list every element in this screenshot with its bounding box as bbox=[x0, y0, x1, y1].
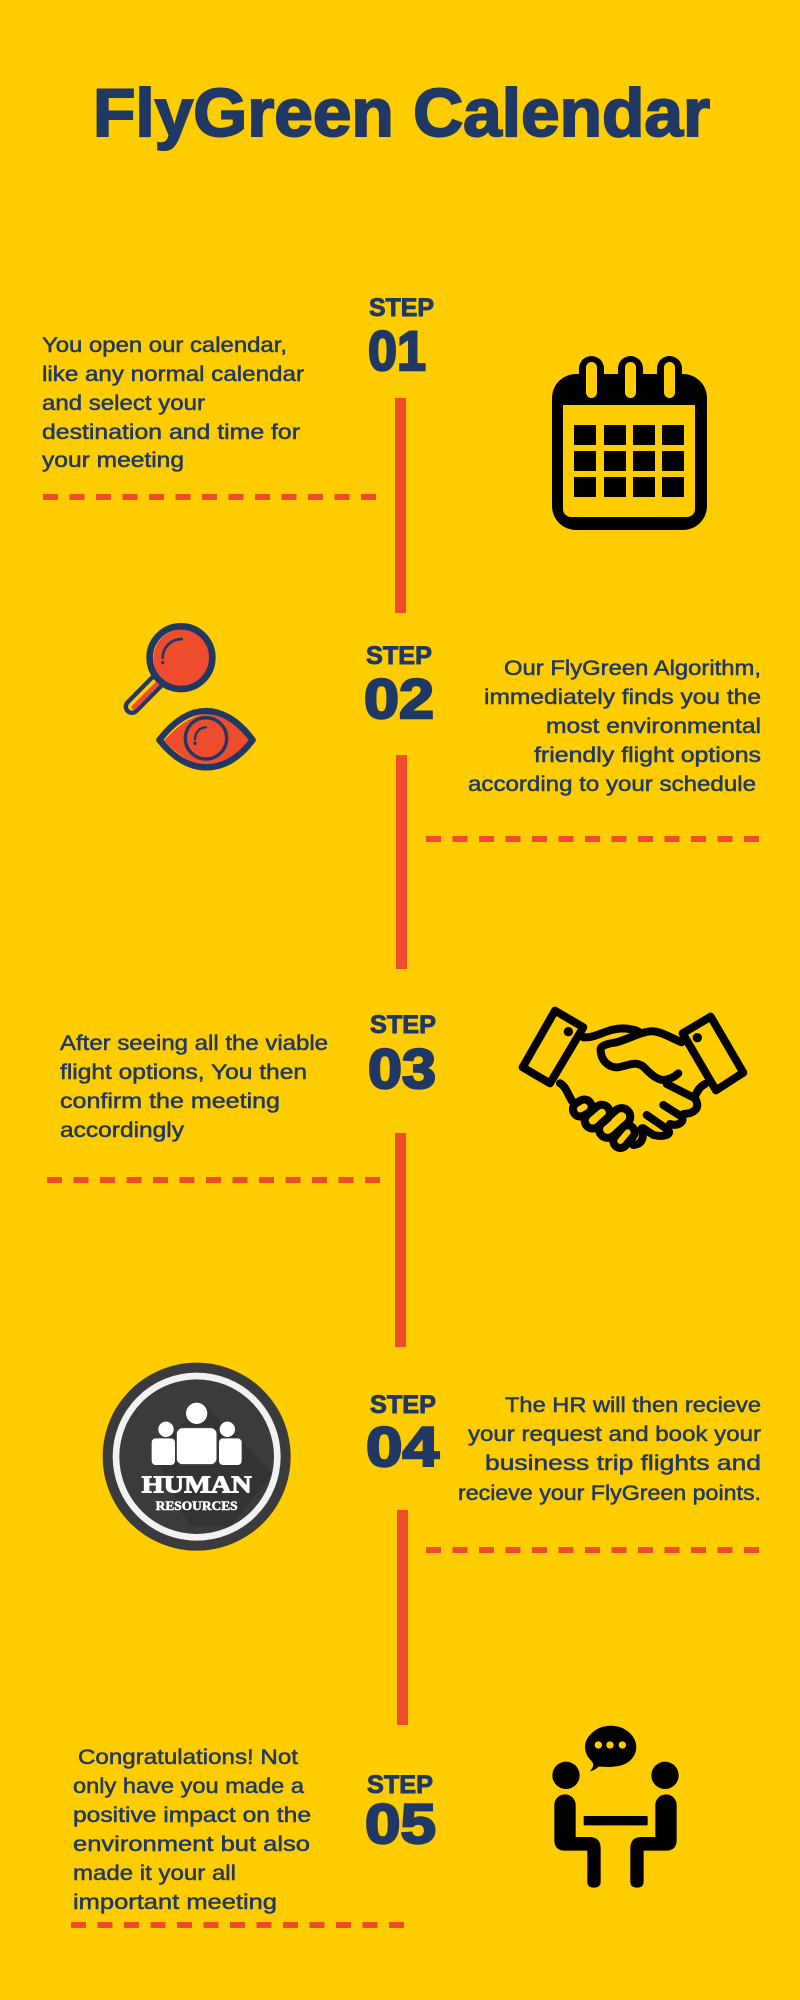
step 3 text bbox=[60, 1032, 328, 1142]
icon: human resources badge: HUMAN bbox=[142, 1473, 252, 1499]
step 1 dashed line bbox=[43, 494, 377, 500]
panel: step 3 bbox=[47, 1011, 743, 1347]
step 5 text bbox=[73, 1746, 311, 1914]
panel: step 2 bbox=[132, 626, 761, 969]
step 1 label: 01 bbox=[368, 319, 426, 382]
step 1 text bbox=[42, 334, 304, 472]
step 2 text: according to your schedule bbox=[468, 773, 756, 796]
step 2 text: immediately finds you the bbox=[484, 686, 761, 709]
step 3 text: After seeing all the viable bbox=[60, 1032, 328, 1055]
step 2 label bbox=[364, 642, 434, 730]
step 1 text: your meeting bbox=[42, 449, 184, 472]
step 5 text: important meeting bbox=[73, 1891, 277, 1914]
step 4 text: business trip flights and bbox=[485, 1452, 761, 1475]
step 1 label: STEP bbox=[369, 294, 434, 322]
panel: step 1 bbox=[42, 294, 707, 613]
step 4 dashed line bbox=[426, 1547, 761, 1553]
step 2 text bbox=[468, 657, 761, 796]
step 4 text: The HR will then recieve bbox=[505, 1394, 761, 1417]
step 4 label bbox=[366, 1391, 439, 1478]
step 2 text: friendly flight options bbox=[534, 744, 761, 767]
step 5 text: made it your all bbox=[73, 1862, 236, 1885]
step 5 text: environment but also bbox=[73, 1833, 310, 1856]
step 4 label: 04 bbox=[366, 1415, 439, 1478]
step 5 label: STEP bbox=[367, 1771, 433, 1799]
icon: magnifier and eye bbox=[132, 626, 253, 767]
step 3 vertical bar bbox=[395, 1133, 406, 1347]
step 5 text: Congratulations! Not bbox=[78, 1746, 298, 1769]
step 3 text: flight options, You then bbox=[60, 1061, 307, 1084]
step 5 text: only have you made a bbox=[73, 1775, 304, 1798]
step 4 vertical bar bbox=[397, 1510, 408, 1725]
step 3 text: accordingly bbox=[60, 1119, 185, 1142]
step 1 vertical bar bbox=[395, 398, 406, 613]
panel: step 5 bbox=[71, 1726, 679, 1925]
step 5 label: 05 bbox=[365, 1792, 436, 1855]
step 3 text: confirm the meeting bbox=[60, 1090, 280, 1113]
step 3 label bbox=[368, 1011, 436, 1100]
step 3 dashed line bbox=[47, 1177, 380, 1183]
step 3 label: 03 bbox=[368, 1037, 436, 1100]
step 1 text: You open our calendar, bbox=[42, 334, 287, 357]
step 1 text: destination and time for bbox=[42, 421, 300, 444]
step 4 text: recieve your FlyGreen points. bbox=[458, 1482, 761, 1505]
step 5 dashed line bbox=[71, 1922, 406, 1928]
step 2 text: Our FlyGreen Algorithm, bbox=[504, 657, 761, 680]
icon: handshake bbox=[523, 1011, 743, 1151]
icon: two people at table bbox=[552, 1726, 679, 1888]
step 2 label: STEP bbox=[366, 642, 432, 670]
icon: calendar bbox=[552, 356, 707, 530]
step 2 label: 02 bbox=[364, 667, 434, 730]
step 5 label bbox=[365, 1771, 436, 1855]
icon: human resources badge bbox=[103, 1363, 291, 1551]
step 2 text: most environmental bbox=[546, 715, 761, 738]
step 2 dashed line bbox=[426, 836, 761, 842]
title: FlyGreen Calendar bbox=[93, 75, 710, 151]
step 1 text: like any normal calendar bbox=[42, 363, 304, 386]
panel: step 4 bbox=[103, 1363, 761, 1725]
step 1 text: and select your bbox=[42, 392, 205, 415]
step 1 label bbox=[368, 294, 434, 382]
step 2 vertical bar bbox=[396, 755, 407, 969]
step 4 text bbox=[458, 1394, 761, 1505]
icon: human resources badge: RESOURCES bbox=[156, 1499, 238, 1513]
step 4 label: STEP bbox=[370, 1391, 436, 1419]
step 3 label: STEP bbox=[370, 1011, 436, 1039]
step 5 text: positive impact on the bbox=[73, 1804, 311, 1827]
step 4 text: your request and book your bbox=[468, 1423, 761, 1446]
